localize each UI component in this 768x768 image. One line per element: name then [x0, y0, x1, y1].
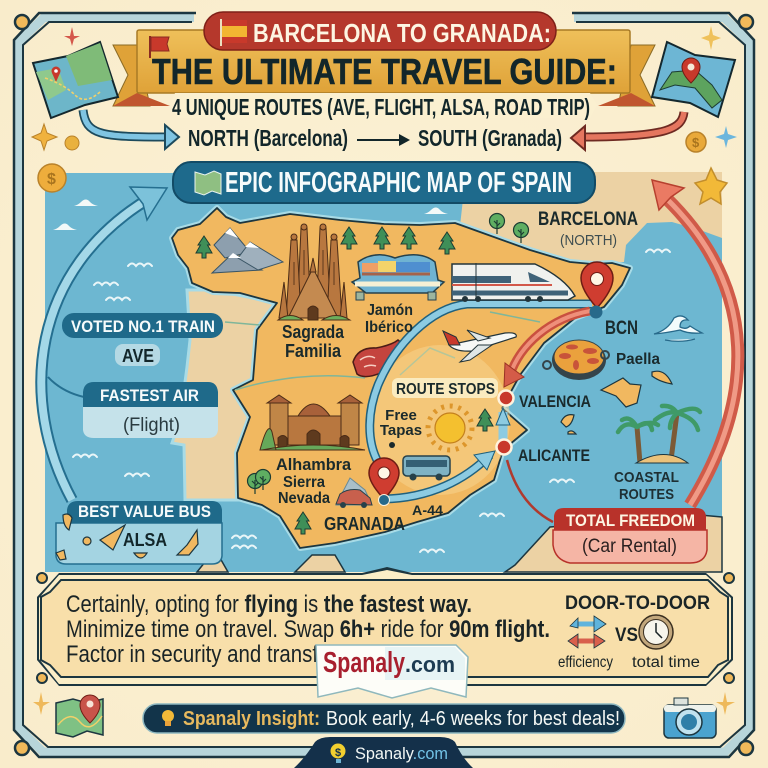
icon: sun: [428, 406, 472, 450]
body text: [66, 591, 550, 668]
icon: palm trees: [618, 406, 700, 463]
door-to-door comparison: DOOR-TO-DOOR: [565, 593, 710, 614]
icon: ocean wave: [654, 316, 702, 341]
callout: Spanaly insight: Book early, 4-6 weeks for best deals!: [326, 708, 620, 730]
icon: footer bulb: $: [335, 747, 341, 759]
callout: Flight: [83, 382, 218, 438]
label: Sagrada Familia: [282, 322, 345, 361]
tree near Valencia: [477, 409, 493, 431]
coin top left: [38, 164, 66, 192]
direction line: SOUTH (Granada): [418, 125, 562, 151]
icon: mountains: [196, 228, 283, 273]
route: Valencia to Alicante: [496, 408, 510, 445]
Canary islands: [56, 514, 198, 560]
red flag: [150, 36, 169, 58]
icon: right map with red arrow: [571, 42, 735, 150]
icon: jamon: [353, 340, 404, 377]
waves and clouds: [53, 200, 670, 552]
star top right: [695, 168, 727, 204]
icon: left map with blue arrow: [33, 42, 179, 149]
route: red road route: [504, 311, 590, 387]
callout: AVE: VOTED NO.1 TRAIN: [71, 318, 215, 336]
body text: Certainly, opting for flying is the fastest way.: [66, 591, 472, 618]
marker: Alicante: [496, 440, 590, 465]
icon: footer bulb: [330, 744, 346, 763]
logo: Spanaly.com book: Spanaly: [323, 647, 405, 679]
label: Sagrada Familia: Familia: [285, 341, 342, 361]
icon: light bulb: [162, 710, 174, 726]
marker: Granada pin: [369, 458, 399, 506]
callout: Spanaly insight: [143, 704, 625, 733]
footer tab: [294, 737, 473, 768]
door-to-door comparison: efficiency: [558, 654, 613, 671]
body text: Factor in security and transf: [66, 641, 318, 668]
land: Portugal: [172, 290, 277, 500]
sparkles lower: [33, 692, 735, 715]
icon: Gaudi bench: [352, 255, 444, 300]
Balearic islands: [561, 371, 672, 434]
direction line: NORTH (Barcelona): [188, 125, 348, 151]
decorative sparkles and coins: $: [692, 135, 700, 150]
callout: ALSA: ALSA: [123, 530, 167, 550]
label: free tapas: Tapas: [380, 422, 422, 439]
header pill: map title: [173, 162, 595, 203]
label: free tapas: Free: [385, 407, 417, 424]
callout: Spanaly insight: Spanaly Insight:: [183, 708, 320, 730]
callout: car rental: TOTAL FREEDOM: [566, 511, 695, 530]
body text: Minimize time on travel. Swap 6h+ ride for 90m flight.: [66, 616, 550, 643]
title banner: [113, 12, 655, 120]
label: Sagrada Familia: Sagrada: [282, 322, 345, 342]
label: BCN: BCN: [605, 318, 638, 339]
sea: [45, 173, 722, 572]
marker: Alicante: ALICANTE: [518, 446, 590, 465]
label: coastal routes: [614, 469, 679, 503]
callout: AVE: [62, 313, 223, 366]
panel: map of Spain: [41, 162, 738, 572]
decorative sparkles and coins: [32, 26, 737, 152]
label: Alhambra Sierra Nevada: [276, 455, 352, 507]
label: Jamon Iberico: Ibérico: [365, 319, 413, 336]
label: Barcelona: [538, 209, 638, 249]
header pill: map title: EPIC INFOGRAPHIC MAP OF SPAIN: [225, 167, 572, 199]
label: Barcelona: BARCELONA: [538, 209, 638, 230]
callout: AVE: AVE: [122, 346, 154, 366]
callout: ALSA: BEST VALUE BUS: [78, 502, 211, 521]
logo: Spanaly.com book: [316, 645, 468, 698]
footer tab: Spanaly.com: [355, 744, 448, 763]
label: Alhambra Sierra Nevada: Sierra: [283, 474, 325, 491]
trees north: [341, 214, 528, 254]
door-to-door comparison: [558, 593, 710, 671]
route: thin red curve: [507, 460, 553, 522]
icon: airplane: [443, 330, 516, 362]
label: Jamon Iberico: Jamón: [367, 302, 413, 319]
red long arrow: [652, 180, 738, 505]
icon: car with hills: [336, 478, 372, 508]
land: France: [455, 172, 722, 264]
trees south: [248, 470, 311, 534]
callout: car rental: [553, 508, 707, 563]
icon: camera: [664, 698, 716, 738]
label: coastal routes: ROUTES: [619, 486, 674, 503]
label: coastal routes: COASTAL: [614, 469, 679, 486]
marker: Valencia: VALENCIA: [519, 392, 591, 411]
coin top left: $: [47, 171, 56, 188]
label: Barcelona: (NORTH): [560, 232, 617, 249]
icon: bottom map: [56, 695, 103, 737]
title top pill: [204, 12, 556, 50]
logo: Spanaly.com book: .com: [405, 652, 455, 677]
subtitle: 4 UNIQUE ROUTES (AVE, FLIGHT, ALSA, ROAD TRIP): [172, 94, 590, 120]
route: Granada to Alicante: [384, 451, 495, 499]
label: Granada: GRANADA: [324, 514, 405, 534]
callout: ALSA: [56, 501, 222, 564]
route: blue train route: [370, 304, 592, 462]
icon: Alhambra: [260, 395, 365, 450]
door-to-door comparison: total time: [632, 654, 700, 671]
callout: car rental: (Car Rental): [582, 536, 677, 557]
title top pill: BARCELONA TO GRANADA:: [253, 18, 551, 48]
icon: train: [452, 263, 575, 302]
title main heading: THE ULTIMATE TRAVEL GUIDE:: [152, 51, 617, 92]
label: A-44: A-44: [412, 502, 443, 518]
label: Alhambra Sierra Nevada: Nevada: [278, 490, 330, 507]
label: free tapas: [380, 407, 422, 448]
callout: Flight: (Flight): [123, 415, 180, 436]
label: Paella: Paella: [616, 351, 660, 368]
label: route stops: ROUTE STOPS: [396, 381, 495, 398]
panel: text explanation: [37, 567, 734, 686]
door-to-door comparison: VS: [615, 625, 638, 646]
land: Africa: [505, 515, 722, 572]
direction line: [188, 125, 562, 151]
icon: paella: [543, 340, 609, 380]
icon: bus: [403, 456, 450, 480]
label: Alhambra Sierra Nevada: Alhambra: [276, 455, 352, 474]
marker: BCN pin: [581, 262, 613, 318]
icon: Sagrada Familia: [278, 224, 350, 320]
marker: Valencia: [498, 390, 591, 411]
land: Spain: [172, 208, 630, 548]
label: Jamon Iberico: [365, 302, 413, 336]
callout: Flight: FASTEST AIR: [100, 386, 199, 405]
blue long arrow: [41, 187, 167, 500]
